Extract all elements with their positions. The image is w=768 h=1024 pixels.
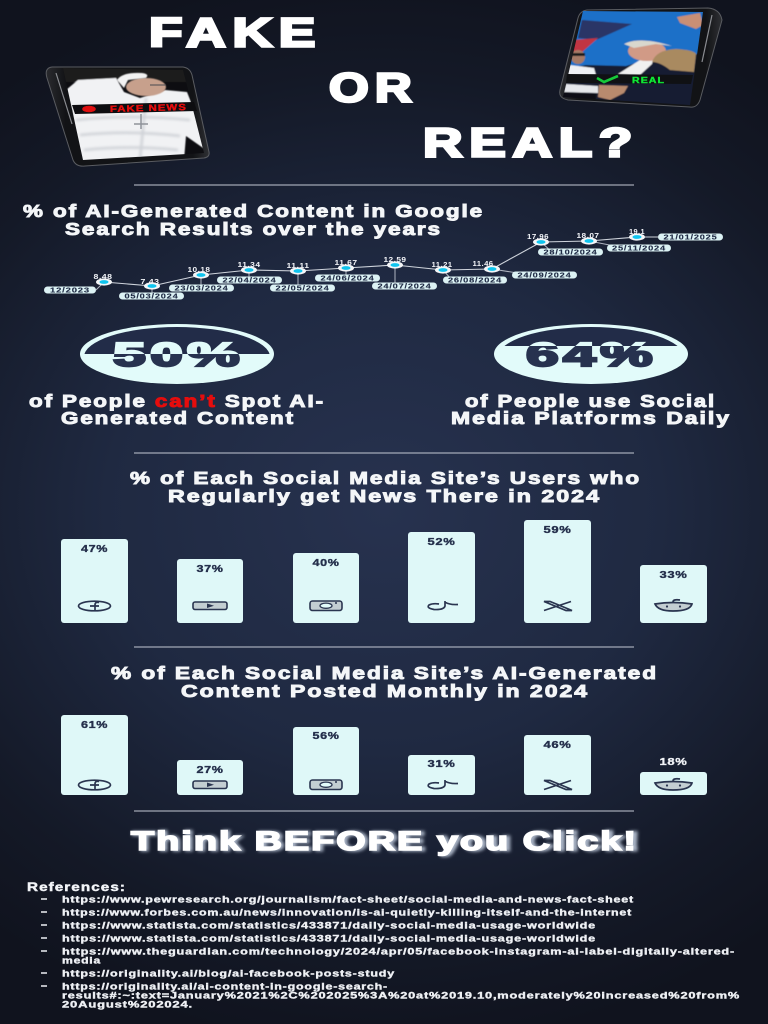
stat: 50 percent badge <box>80 324 274 387</box>
reference list: results#:~:text=January%2021%2C%202025%3A%20at%2019.10,moderately%20increased%20from% <box>62 990 740 1000</box>
bar: instagram 40%: 40% <box>312 558 340 569</box>
title: REAL? <box>423 120 639 166</box>
bar: tiktok 31%: 31% <box>428 759 456 770</box>
bar: facebook 47% <box>61 539 128 623</box>
bar: x 59% <box>524 520 591 623</box>
bar: instagram 56% <box>293 727 359 795</box>
line chart: AI content over time: 17.96 <box>527 232 549 241</box>
bar: x 46% <box>524 735 591 795</box>
reference list: https://www.forbes.com.au/news/innovation/is-ai-quietly-killing-itself-and-the-internet <box>62 906 632 918</box>
stat text: social media daily <box>451 391 731 428</box>
stat text: social media daily: of People use Social <box>465 391 716 411</box>
stat text: cannot spot AI content <box>29 391 325 428</box>
call to action: Think BEFORE you Click! <box>133 826 642 856</box>
title: OR <box>329 64 418 110</box>
heading: AI content in search <box>23 201 484 239</box>
bar: reddit 33% <box>640 565 707 623</box>
heading: news on social media <box>130 468 641 506</box>
fake news banner: FAKE NEWS <box>110 102 187 114</box>
call to action: Think BEFORE you Click! <box>131 826 638 856</box>
bar: reddit 18% <box>640 757 707 795</box>
bar: instagram 40% <box>293 553 359 623</box>
line chart: AI content over time: 28/10/2024 <box>544 250 598 256</box>
bar: x 59%: 59% <box>544 525 572 536</box>
heading: AI content in search: Search Results over the years <box>65 219 442 239</box>
heading: AI content in search: % of AI-Generated Content in Google <box>23 201 484 221</box>
line chart: AI content over time <box>44 227 723 300</box>
bar: facebook 61% <box>61 715 128 795</box>
line chart: AI content over time: 22/05/2024 <box>276 286 330 292</box>
icon: phone with real news image <box>555 8 722 110</box>
line chart: AI content over time: 24/06/2024 <box>320 276 374 282</box>
heading: news on social media: % of Each Social Media Site’s Users who <box>130 468 641 488</box>
line chart: AI content over time: 25/11/2024 <box>612 246 666 252</box>
reference list: https://www.statista.com/statistics/433871/daily-social-media-usage-worldwide <box>62 932 596 944</box>
bar: tiktok 52% <box>408 532 475 623</box>
bar: reddit 33%: 33% <box>660 570 688 581</box>
bar: youtube 37% <box>177 559 243 623</box>
stat text: cannot spot AI content: of People can’t Spot AI- <box>29 391 325 411</box>
reference list: https://www.pewresearch.org/journalism/fact-sheet/social-media-and-news-fact-sheet <box>62 894 634 904</box>
stat text: social media daily: Media Platforms Daily <box>451 408 731 428</box>
reference list <box>41 894 740 1010</box>
references <box>27 882 740 1010</box>
bar: instagram 56%: 56% <box>312 731 340 742</box>
line chart: AI content over time: 26/08/2024 <box>448 278 502 284</box>
stat text: cannot spot AI content: Generated Content <box>61 408 295 428</box>
line chart: AI content over time: 22/04/2024 <box>222 278 276 284</box>
bar: reddit 18%: 18% <box>660 757 688 768</box>
stat: 64 percent badge <box>494 324 688 387</box>
bar: tiktok 52%: 52% <box>428 537 456 548</box>
line chart: AI content over time: 11.67 <box>334 258 358 267</box>
line chart: AI content over time: 21/01/2025 <box>664 234 718 242</box>
line chart: AI content over time: 10.18 <box>188 265 210 274</box>
reference list: https://originality.ai/ai-content-in-google-search- <box>62 980 388 992</box>
bar: youtube 37%: 37% <box>196 564 224 575</box>
bar: x 46%: 46% <box>544 740 572 751</box>
icon: phone with fake news image <box>46 66 210 166</box>
reference list: https://www.statista.com/statistics/433871/daily-social-media-usage-worldwide <box>62 920 596 930</box>
line chart: AI content over time: 7.43 <box>140 277 160 286</box>
heading: AI content per site: % of Each Social Media Site’s AI-Generated <box>111 663 658 683</box>
stat: 50 percent badge: 50% <box>113 336 244 373</box>
line chart: AI content over time: 24/07/2024 <box>378 284 432 290</box>
line chart: AI content over time: 11.11 <box>286 261 310 270</box>
fake news banner <box>72 102 197 114</box>
reference list: https://originality.ai/blog/ai-facebook-posts-study <box>62 968 395 978</box>
bar: facebook 47%: 47% <box>81 544 108 555</box>
reference list: 20August%202024. <box>62 998 193 1010</box>
line chart: AI content over time: 11.46 <box>472 259 494 268</box>
bar: facebook 61%: 61% <box>81 720 108 731</box>
reference list: media <box>62 954 101 966</box>
bar chart: regularly get news <box>61 520 707 623</box>
bar: tiktok 31% <box>408 755 475 795</box>
line chart: AI content over time: 11.34 <box>238 260 261 269</box>
bar: youtube 27% <box>177 760 243 795</box>
line chart: AI content over time: 11.21 <box>432 260 452 269</box>
stat: 64 percent badge: 64% <box>526 336 657 373</box>
line chart: AI content over time: 8.48 <box>94 272 112 281</box>
stat: 64 percent badge: 64% <box>526 336 657 373</box>
line chart: AI content over time: 12.59 <box>384 255 406 264</box>
stat: 50 percent badge: 50% <box>113 336 244 373</box>
real banner <box>566 74 693 85</box>
heading: AI content per site: Content Posted Monthly in 2024 <box>181 681 589 701</box>
title: FAKE <box>149 10 322 56</box>
line chart: AI content over time: 12/2023 <box>50 288 90 294</box>
bar chart: AI content monthly <box>61 715 707 795</box>
bar: youtube 27%: 27% <box>196 765 224 776</box>
line chart: AI content over time: 23/03/2024 <box>174 286 228 292</box>
line chart: AI content over time: 19.1 <box>629 227 645 236</box>
heading: news on social media: Regularly get News There in 2024 <box>168 486 601 506</box>
real banner: REAL <box>632 76 665 85</box>
call to action <box>131 826 642 856</box>
references heading: References: <box>27 882 126 894</box>
line chart: AI content over time: 24/09/2024 <box>518 272 572 280</box>
heading: AI content per site <box>111 663 658 701</box>
line chart: AI content over time: 18.07 <box>576 231 600 240</box>
title <box>149 10 639 166</box>
reference list: https://www.theguardian.com/technology/2024/apr/05/facebook-instagram-ai-label-digitally-altered- <box>62 946 735 956</box>
line chart: AI content over time: 05/03/2024 <box>124 294 178 300</box>
